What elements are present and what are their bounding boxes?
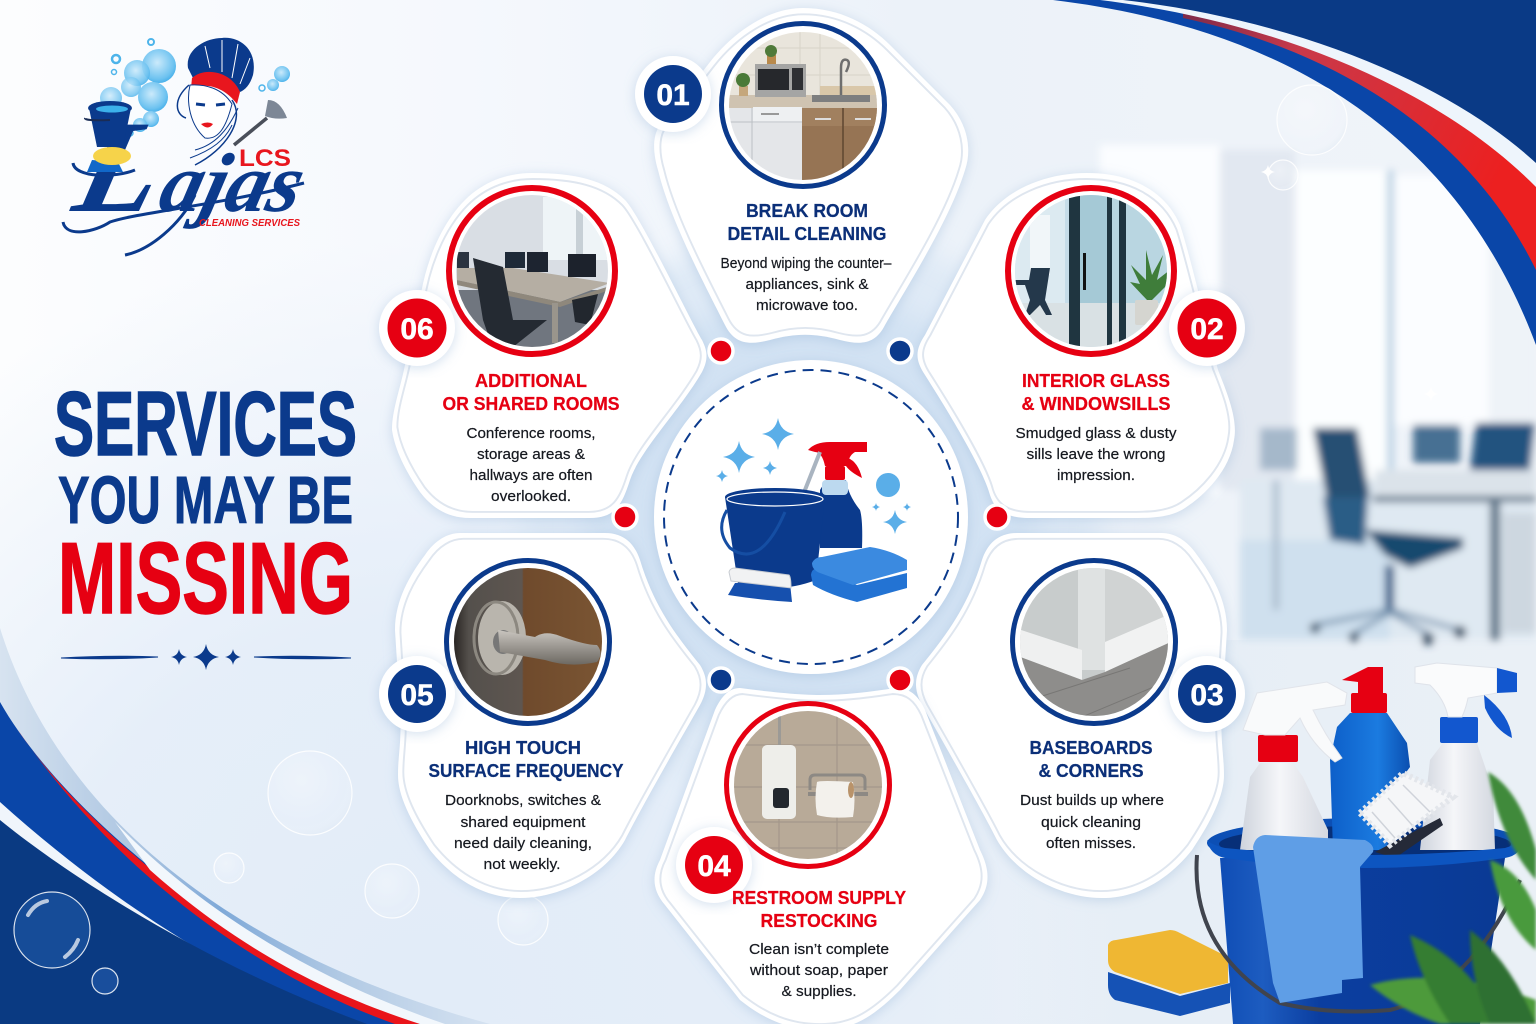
title: MISSING [58,523,353,635]
badge 04: 04 [697,850,731,883]
panel: 01 break room [635,8,968,343]
description: not weekly. [484,857,560,873]
badge 02 [1169,290,1245,366]
heading: & WINDOWSILLS [1022,393,1170,414]
heading [442,370,620,414]
description: Conference rooms, [466,426,596,442]
decorative swoosh: top right [1053,0,1536,345]
logo tagline: CLEANING SERVICES [199,217,300,229]
panel: 03 baseboards [916,533,1245,898]
badge 05 [379,656,455,732]
badge 01 [635,56,711,132]
description: shared equipment [460,815,586,831]
badge 05: 05 [400,679,434,712]
title: SERVICES [54,374,357,475]
description [720,256,892,314]
heading: OR SHARED ROOMS [442,393,620,414]
description: without soap, paper [749,963,888,979]
heading: & CORNERS [1038,760,1144,781]
description: Smudged glass & dusty [1016,426,1177,442]
photo: door handle [454,568,602,716]
logo plunger [234,100,287,145]
logo LCS: LCS [239,145,291,172]
description: Dust builds up where [1020,793,1164,809]
photo: glass door [1015,195,1167,347]
description [445,793,601,873]
description [466,426,596,505]
description: sills leave the wrong [1026,447,1166,463]
title: YOU MAY BE [58,463,353,538]
description: storage areas & [477,447,585,463]
description: hallways are often [470,468,592,484]
badge 03: 03 [1190,679,1224,712]
photo ring [1012,560,1176,724]
heading [428,737,624,781]
description: impression. [1057,468,1135,484]
heading: BASEBOARDS [1030,737,1152,758]
supplies photo: towel [1253,835,1373,1003]
heading: RESTROOM SUPPLY [732,887,907,908]
heading: ADDITIONAL [475,370,587,391]
heading [1030,737,1152,781]
heading: HIGH TOUCH [465,737,581,758]
description: microwave too. [756,298,858,314]
right white bottle [1415,663,1517,850]
photo: conference room [456,195,608,347]
description: need daily cleaning, [454,836,592,852]
scrub brush [728,568,792,602]
scrub brush [1360,773,1453,858]
description: often misses. [1046,836,1136,852]
description [1016,426,1177,484]
plant leaves [1370,772,1536,1024]
heading: BREAK ROOM [746,200,868,221]
center circle [654,360,968,674]
heading [728,200,886,244]
badge 06: 06 [400,313,434,346]
panel: 06 additional rooms [379,173,706,518]
description: Beyond wiping the counter– [720,256,892,272]
logo: Lajas Cleaning Services [62,38,325,255]
decorative swoosh: bottom left [0,628,490,1024]
photo ring [449,188,615,354]
description: quick cleaning [1041,815,1141,831]
photo ring [446,560,610,724]
panel: 02 interior glass [918,173,1245,518]
photo: kitchen [729,32,877,180]
badge 02: 02 [1190,313,1224,346]
heading: DETAIL CLEANING [728,223,886,244]
panel: 04 restroom supply [655,688,988,1024]
description: appliances, sink & [746,277,869,293]
logo wordmark: L [62,94,180,240]
bucket [722,488,825,588]
title [54,374,357,635]
central halo [521,227,1101,807]
logo wordmark flourish [63,163,304,255]
logo bubbles [100,39,290,136]
connector dots [613,339,1009,692]
heading: INTERIOR GLASS [1022,370,1170,391]
description: Clean isn’t complete [749,942,889,958]
sparkles [716,418,911,534]
description: Doorknobs, switches & [445,793,601,809]
logo chef woman [177,38,254,165]
description [749,942,889,1000]
photo: restroom dispensers [730,708,886,863]
blue bottle [1330,667,1410,850]
photo ring [722,24,884,186]
badge 01: 01 [656,79,690,112]
photo ring [726,704,890,866]
heading [1022,370,1170,414]
badge 03 [1169,656,1245,732]
panel: 05 high touch [379,533,706,898]
heading [732,887,907,931]
left white bottle [1240,682,1347,850]
icon: cleaning supplies [716,418,911,602]
title ornament [61,644,351,670]
description [1020,793,1164,852]
heading: SURFACE FREQUENCY [428,760,624,781]
towels [811,547,907,602]
supplies photo: sponge [1108,930,1230,1016]
logo bucket [85,101,132,147]
badge 04 [676,827,752,903]
supplies photo: bottles [1240,663,1517,858]
photo ring [1008,188,1174,354]
logo wordmark: ajas [151,137,314,230]
description: overlooked. [491,489,571,505]
description: & supplies. [782,984,856,1000]
spray bottle [801,442,867,548]
logo sponge [87,147,131,172]
badge 06 [379,290,455,366]
supplies photo: bucket back [1207,818,1523,868]
heading: RESTOCKING [760,910,878,931]
photo: baseboard corner [1020,568,1168,716]
supplies photo: bucket [1196,840,1522,1024]
